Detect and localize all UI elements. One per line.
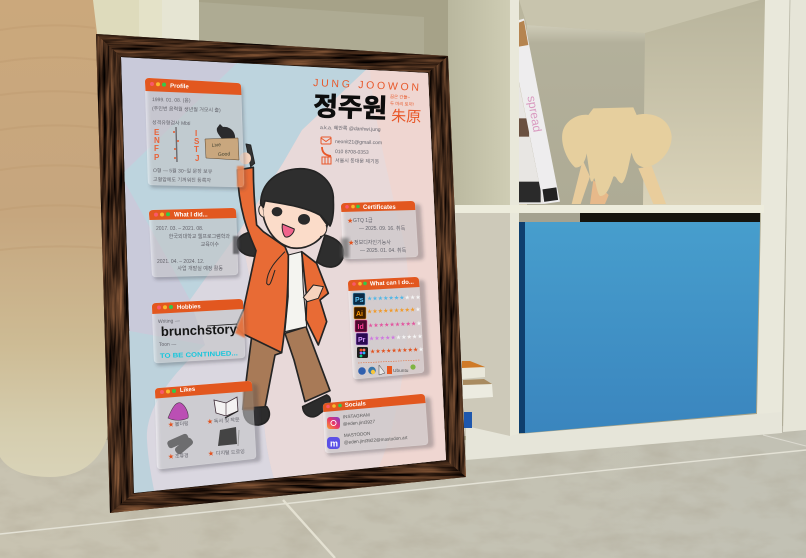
title block	[313, 77, 421, 133]
panel header	[152, 299, 243, 314]
to be continued: TO BE CONTINUED...	[160, 350, 238, 360]
panel body	[348, 277, 424, 379]
certificate 2 date: — 2025. 01. 04. 취득	[360, 247, 407, 254]
profile note line 2: 고혈압에도 기꺼워진 등록자	[153, 176, 211, 184]
panel: profile	[145, 78, 246, 190]
mbti left letters	[154, 128, 160, 162]
mbti left letters: E	[154, 128, 160, 137]
heading: Profile	[170, 84, 189, 90]
blurred jacket behind glass	[235, 314, 245, 338]
first period: 2017. 03. – 2021. 08.	[156, 226, 203, 232]
panel shadow	[343, 204, 424, 262]
icon: phone	[322, 147, 331, 156]
blurred hair behind glass	[341, 238, 349, 258]
Korean name: 정주원	[313, 91, 388, 124]
panel shadow	[154, 302, 247, 366]
blurred arm behind glass	[237, 166, 244, 187]
English name: JUNG JOOWON	[313, 77, 419, 94]
panel: what can I do	[348, 277, 430, 382]
label: reading: 독서 및 작문	[214, 416, 240, 425]
panel: what I did	[149, 208, 240, 280]
icon: binoculars	[166, 433, 194, 455]
mbti left letters: F	[154, 144, 159, 153]
hanja name: 朱原	[391, 108, 421, 126]
icon: drawing tablet	[218, 427, 239, 446]
mbti scale	[173, 127, 179, 162]
contact list	[321, 137, 382, 165]
birth note: (주민번 음력월 생년월 거모시 출)	[152, 105, 221, 114]
panel: hobbies	[152, 299, 247, 366]
window dots	[154, 212, 170, 217]
mbti right letters: S	[194, 137, 200, 146]
panel header	[149, 208, 236, 220]
second role: 사업 개발실 예정 활동	[177, 265, 223, 272]
icon: illustrator: Ai	[356, 311, 363, 318]
poster colour shape: blue diagonal	[121, 60, 370, 300]
first school: 한국외대학교 웹프로그램학과	[169, 233, 230, 240]
address: 서울시 동대문 제기동	[335, 157, 380, 165]
label: digital drawing: ★	[208, 450, 214, 458]
panel body	[341, 201, 418, 259]
ears	[259, 204, 327, 237]
certificate 2 name	[348, 239, 391, 247]
brunch story wordmark: brunchstory	[161, 321, 238, 339]
poster	[121, 57, 450, 495]
rating: photoshop: ★★★★★★★★★★	[367, 294, 421, 302]
certificate 1 name: GTQ 1급	[353, 218, 373, 224]
label: bouldering	[168, 420, 189, 429]
stacked books	[462, 361, 493, 428]
icon: climbing hold	[168, 403, 188, 420]
icon: mail	[321, 137, 331, 144]
label: birdwatching: 조류경	[175, 452, 189, 460]
email: neonit21@gmail.com	[335, 139, 382, 146]
poster colour shape: peach	[370, 66, 450, 472]
poster colour shape: pink	[240, 66, 450, 482]
panel: socials	[323, 394, 434, 456]
mbti left letters: P	[154, 153, 160, 162]
poster base colour	[121, 57, 446, 493]
panel shadow	[151, 211, 240, 280]
character illustration	[236, 144, 343, 425]
book on shelf	[519, 19, 560, 204]
instagram label: INSTAGRAM	[343, 412, 370, 419]
eyes	[272, 207, 310, 225]
blurred hair behind glass	[233, 236, 239, 254]
icon: black cat	[217, 124, 235, 139]
sign: live and good: Good	[218, 151, 231, 158]
icon: premiere: Pr	[358, 337, 366, 344]
label: reading: ★	[207, 418, 213, 426]
wall panels behind frame	[90, 0, 424, 90]
mouth	[282, 224, 294, 237]
waist hand and phone	[303, 285, 323, 302]
jacket drawstring	[267, 252, 285, 285]
panel: likes	[155, 381, 261, 472]
icon: figma	[357, 347, 368, 358]
panel shadow	[325, 397, 434, 456]
alias: a.k.a. 혜안록 @danhwi.jung	[320, 124, 381, 133]
shirt	[285, 252, 307, 332]
certificate 1 name: ★	[347, 217, 353, 225]
icon: instagram	[327, 417, 340, 429]
rating: premiere: ★★★★★★★★★★	[369, 333, 423, 342]
poster colour shape: blue lower left	[129, 330, 186, 493]
trousers	[243, 327, 330, 409]
heading: Socials	[345, 401, 367, 409]
panel body	[149, 208, 238, 277]
heading: Likes	[180, 387, 196, 394]
certificate 1 name	[347, 217, 373, 225]
instagram handle: @eden.jint3927	[343, 419, 376, 426]
mbti right letters	[194, 129, 200, 163]
poster colour shape: lavender	[147, 230, 275, 495]
small tagline: 꿈은 간들~	[390, 93, 411, 100]
floor	[0, 425, 806, 558]
heading: What can I do...	[370, 280, 414, 287]
panel body	[152, 299, 245, 363]
picture frame	[96, 34, 466, 513]
second period: 2021. 04. – 2024. 12.	[157, 259, 204, 265]
small tagline second line: 두 마리 토끼!	[390, 100, 414, 108]
mbti right letters: J	[195, 154, 199, 163]
heading: Certificates	[363, 205, 396, 211]
mastodon handle: @eden.jint3922@mastodon.art	[344, 435, 408, 445]
panel header	[348, 277, 420, 291]
panel shadow	[350, 280, 430, 382]
first status: 교육이수	[201, 241, 219, 248]
window dots	[326, 404, 342, 408]
vase	[0, 0, 109, 477]
panel body	[145, 78, 244, 187]
panel header	[145, 78, 241, 95]
icon: book	[214, 397, 238, 418]
panel header	[341, 201, 415, 212]
raised hand	[240, 152, 251, 164]
sign: live and good	[205, 138, 239, 160]
window dots	[160, 389, 176, 394]
label: bouldering: ★	[168, 421, 174, 429]
icon: photoshop: Ps	[355, 297, 364, 304]
head face	[262, 198, 327, 248]
shoes	[243, 395, 330, 425]
rating: illustrator: ★★★★★★★★★★	[367, 306, 421, 315]
hair curls	[237, 230, 343, 267]
certificate 2 name: ★	[348, 239, 354, 247]
wooden elephant	[562, 107, 672, 204]
pen	[246, 144, 255, 167]
writing label: Writing —	[158, 318, 180, 325]
panel header	[155, 381, 252, 398]
panel shadow	[147, 81, 246, 190]
icon: map	[322, 157, 331, 164]
icon: indesign: Id	[358, 324, 364, 331]
mbti right letters: I	[195, 129, 197, 138]
birth date: 1999. 01. 08. (음)	[152, 97, 191, 104]
window dots	[150, 82, 166, 87]
mastodon label: MASTODON	[344, 431, 370, 438]
window dots	[345, 205, 360, 209]
phone number: 010 8708-0353	[335, 149, 369, 156]
heading: Hobbies	[177, 304, 201, 311]
rating: figma: ★★★★★★★★★★	[370, 346, 424, 355]
panel: certificates	[341, 201, 424, 262]
icon: mastodon: m	[330, 438, 338, 448]
wordmark overline	[207, 324, 237, 326]
label: digital drawing	[208, 448, 245, 458]
window dots	[352, 282, 367, 286]
toon label: Toon —	[159, 341, 176, 348]
book on shelf: spread	[524, 95, 545, 133]
mbti label: 성격유형검사 Mbti	[152, 119, 191, 127]
tools row: Ubuntu	[393, 368, 409, 374]
jacket	[236, 167, 328, 353]
mbti left letters: N	[154, 136, 160, 145]
dashed divider	[358, 360, 420, 363]
certificate 2 name: 정보디자인기능사	[354, 239, 391, 246]
heading: What I did...	[174, 212, 208, 218]
panel body	[155, 381, 256, 469]
rating: indesign: ★★★★★★★★★★	[368, 320, 422, 329]
panel body	[323, 394, 428, 453]
panel shadow	[157, 384, 261, 472]
hair top	[261, 169, 334, 226]
label: birdwatching	[168, 452, 189, 461]
label: birdwatching: ★	[168, 453, 174, 461]
label: digital drawing: 디지털 드로잉	[216, 448, 245, 457]
shelf unit	[448, 0, 806, 460]
panel header	[323, 394, 426, 412]
blue storage box	[519, 222, 760, 433]
window dots	[157, 305, 173, 310]
blurred trouser behind glass	[243, 384, 254, 410]
mbti right letters: T	[194, 145, 199, 154]
certificate 1 date: — 2025. 09. 16. 취득	[359, 225, 406, 232]
profile note line 1: O형 — 5월 30~일 문장 보유	[153, 167, 213, 175]
label: bouldering: 볼더링	[175, 420, 189, 428]
label: reading	[207, 416, 240, 426]
sign: live and good: Live	[212, 142, 222, 149]
